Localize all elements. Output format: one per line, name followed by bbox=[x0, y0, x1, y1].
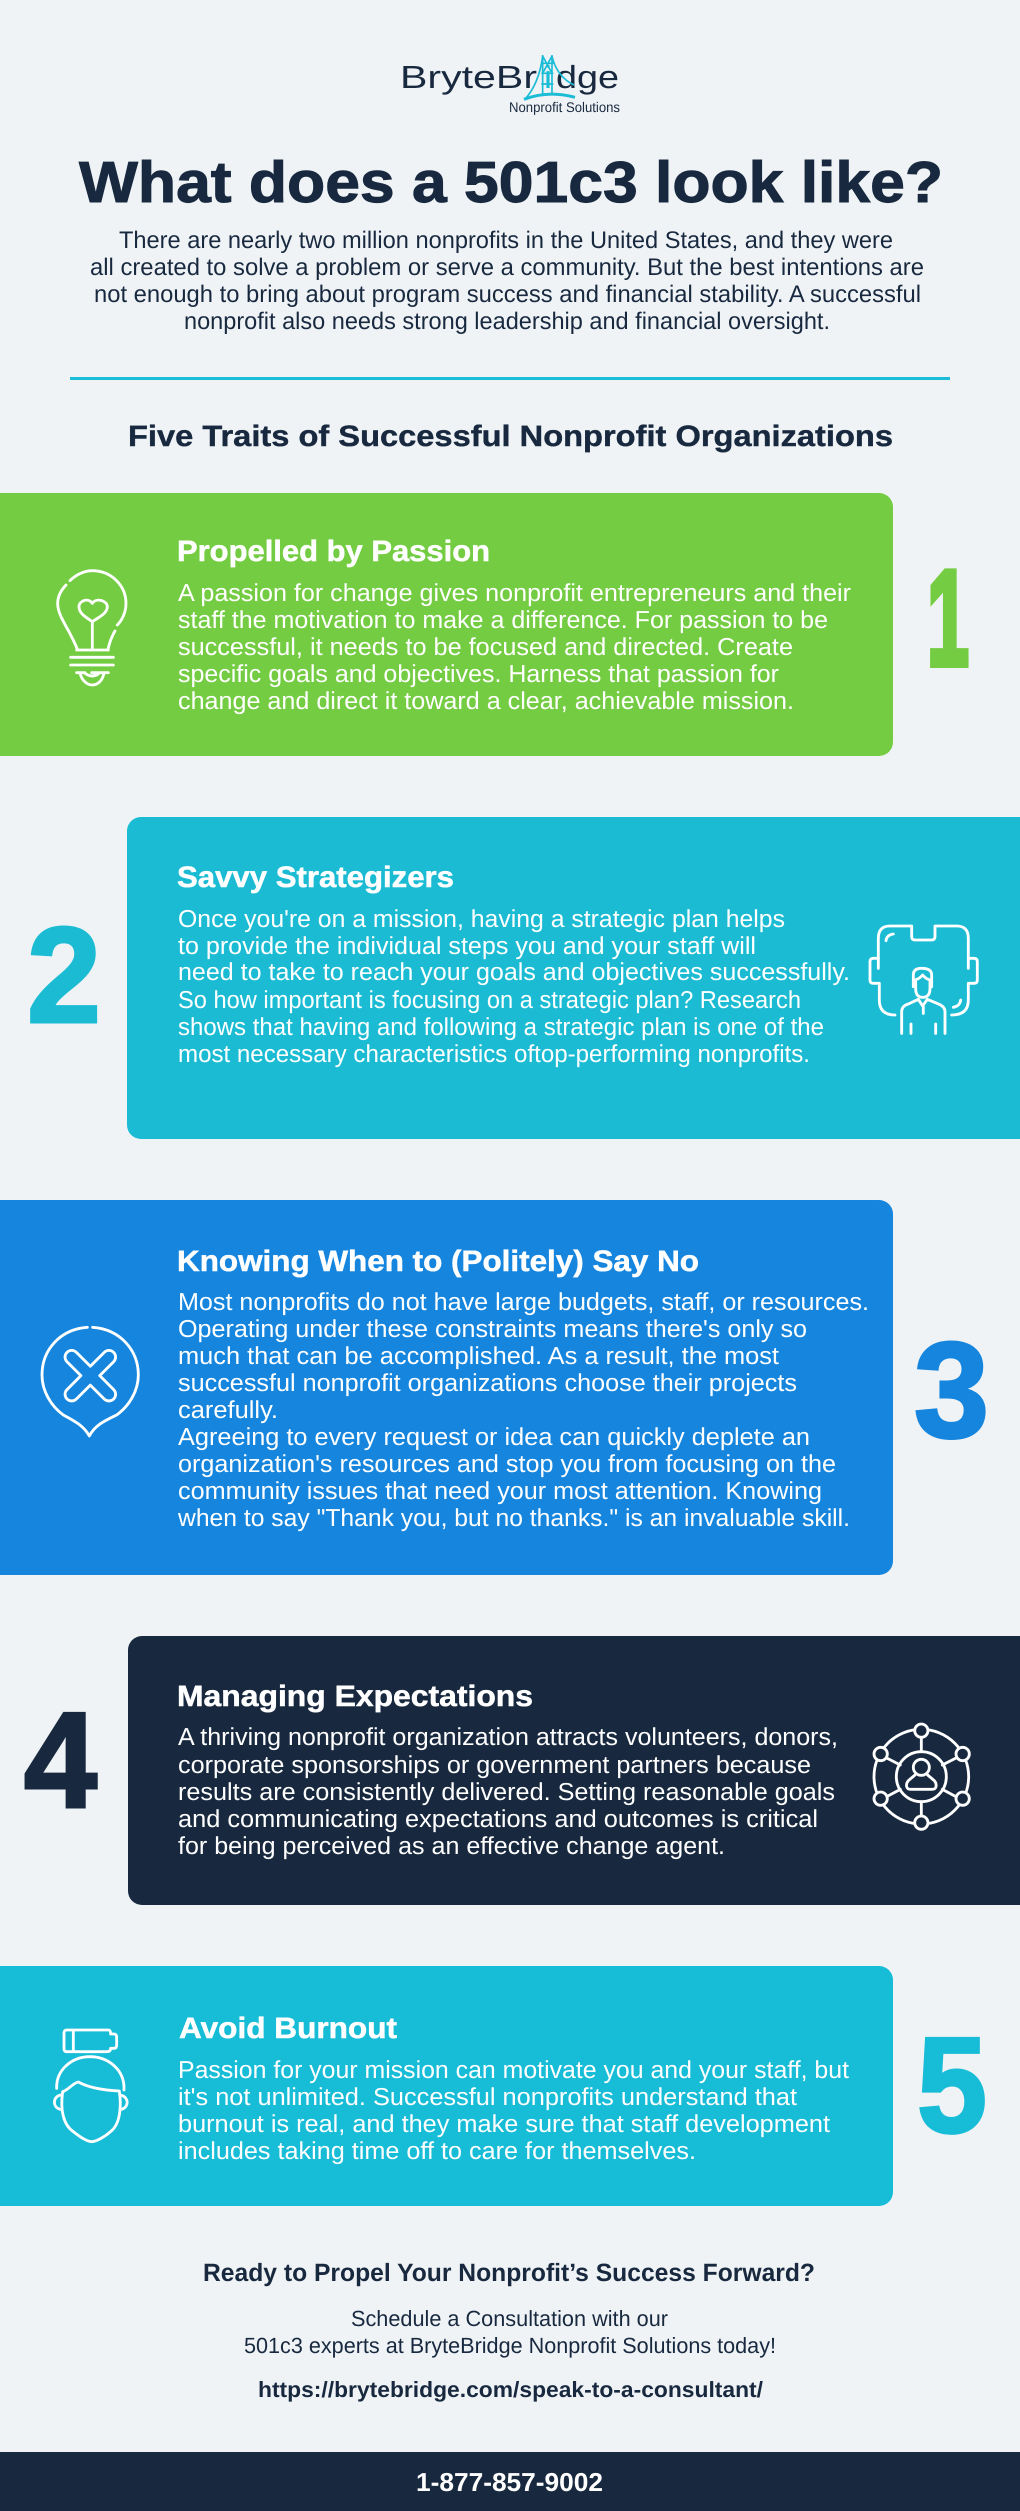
body text: corporate sponsorships or government partners because bbox=[178, 1752, 811, 1779]
logo tagline: Nonprofit Solutions bbox=[509, 99, 620, 115]
body text: change and direct it toward a clear, achievable mission. bbox=[178, 688, 794, 715]
title: What does a 501c3 look like? bbox=[79, 150, 943, 215]
body text: it's not unlimited. Successful nonprofits understand that bbox=[178, 2084, 797, 2111]
website link: https://brytebridge.com/speak-to-a-consultant/ bbox=[258, 2377, 763, 2402]
panel: trait 3 Knowing When to (Politely) Say No bbox=[0, 1200, 989, 1575]
icon: light bulb with heart bbox=[58, 571, 126, 685]
body text: successful nonprofit organizations choose their projects bbox=[178, 1370, 797, 1397]
section heading: Five Traits of Successful Nonprofit Organizations bbox=[128, 420, 893, 453]
intro paragraph: There are nearly two million nonprofits in the United States, and they were bbox=[119, 227, 893, 254]
intro paragraph: all created to solve a problem or serve a community. But the best intentions are bbox=[90, 254, 924, 281]
body text: carefully. bbox=[178, 1397, 278, 1424]
card background bbox=[128, 1636, 1020, 1905]
logo wordmark end: dge bbox=[556, 59, 619, 95]
body text: A thriving nonprofit organization attracts volunteers, donors, bbox=[178, 1724, 838, 1751]
body text: Passion for your mission can motivate you and your staff, but bbox=[178, 2057, 849, 2084]
call to action bbox=[203, 2259, 815, 2402]
body text: burnout is real, and they make sure that staff development bbox=[178, 2111, 830, 2138]
body text: much that can be accomplished. As a result, the most bbox=[178, 1343, 779, 1370]
body text: shows that having and following a strategic plan is one of the bbox=[178, 1014, 824, 1041]
intro paragraph bbox=[90, 227, 924, 335]
panel: trait 2 Savvy Strategizers bbox=[27, 817, 1020, 1139]
number 5: 5 bbox=[917, 2009, 987, 2161]
body text bbox=[178, 906, 850, 1068]
body text: Agreeing to every request or idea can quickly deplete an bbox=[178, 1424, 810, 1451]
body text: organization's resources and stop you from focusing on the bbox=[178, 1451, 836, 1478]
footer background bbox=[0, 2452, 1020, 2511]
logo wordmark hidden i: i bbox=[544, 59, 552, 95]
card background bbox=[0, 1200, 893, 1575]
call to action heading: Ready to Propel Your Nonprofit’s Success Forward? bbox=[203, 2259, 815, 2287]
call to action text bbox=[244, 2306, 776, 2358]
body text: includes taking time off to care for themselves. bbox=[178, 2138, 696, 2165]
heading: Savvy Strategizers bbox=[177, 861, 454, 894]
intro paragraph: not enough to bring about program success and financial stability. A successful bbox=[94, 281, 921, 308]
body text bbox=[178, 580, 851, 715]
body text: A passion for change gives nonprofit entrepreneurs and their bbox=[178, 580, 851, 607]
logo: BryteBridge Nonprofit Solutions bbox=[400, 55, 620, 115]
icon: X in speech bubble bbox=[42, 1327, 138, 1436]
number 3: 3 bbox=[914, 1314, 989, 1466]
body text: Operating under these constraints means there's only so bbox=[178, 1316, 807, 1343]
icon: person in puzzle piece bbox=[870, 926, 977, 1033]
body text: and communicating expectations and outcomes is critical bbox=[178, 1806, 818, 1833]
call to action text: 501c3 experts at BryteBridge Nonprofit Solutions today! bbox=[244, 2333, 776, 2358]
panel: trait 4 Managing Expectations bbox=[24, 1636, 1020, 1905]
heading: Avoid Burnout bbox=[179, 2012, 397, 2045]
body text: most necessary characteristics oftop-performing nonprofits. bbox=[178, 1041, 810, 1068]
body text: when to say "Thank you, but no thanks." is an invaluable skill. bbox=[177, 1505, 850, 1532]
phone number: 1-877-857-9002 bbox=[416, 2467, 603, 2497]
number 2: 2 bbox=[27, 899, 101, 1051]
body text: staff the motivation to make a difference. For passion to be bbox=[178, 607, 828, 634]
body text bbox=[178, 1724, 838, 1860]
body text bbox=[178, 2057, 849, 2165]
body text: So how important is focusing on a strategic plan? Research bbox=[178, 987, 801, 1014]
card background bbox=[127, 817, 1020, 1139]
body text: successful, it needs to be focused and directed. Create bbox=[178, 634, 793, 661]
heading: Knowing When to (Politely) Say No bbox=[177, 1245, 699, 1278]
body text: Once you're on a mission, having a strategic plan helps bbox=[178, 906, 785, 933]
body text: to provide the individual steps you and your staff will bbox=[178, 933, 756, 960]
icon: head with low battery bbox=[54, 2030, 127, 2142]
number 4: 4 bbox=[24, 1684, 97, 1836]
card background bbox=[0, 493, 893, 756]
body text: Most nonprofits do not have large budgets, staff, or resources. bbox=[178, 1289, 869, 1316]
icon: bridge bbox=[524, 55, 575, 99]
card background bbox=[0, 1966, 893, 2206]
body text: results are consistently delivered. Setting reasonable goals bbox=[178, 1779, 835, 1806]
heading: Propelled by Passion bbox=[177, 535, 490, 568]
body text: for being perceived as an effective change agent. bbox=[178, 1833, 725, 1860]
body text: need to take to reach your goals and objectives successfully. bbox=[178, 959, 850, 986]
icon: person network bbox=[874, 1724, 969, 1829]
logo wordmark start: BryteBr bbox=[400, 59, 537, 95]
call to action text: Schedule a Consultation with our bbox=[351, 2306, 668, 2331]
body text: specific goals and objectives. Harness that passion for bbox=[178, 661, 779, 688]
panel: trait 1 Propelled by Passion bbox=[0, 493, 969, 756]
intro paragraph: nonprofit also needs strong leadership and financial oversight. bbox=[184, 308, 830, 335]
number 1: 1 bbox=[927, 542, 969, 694]
footer band with phone number bbox=[0, 2452, 1020, 2511]
panel: trait 5 Avoid Burnout bbox=[0, 1966, 987, 2206]
heading: Managing Expectations bbox=[177, 1680, 533, 1713]
body text: community issues that need your most attention. Knowing bbox=[178, 1478, 822, 1505]
body text bbox=[177, 1289, 869, 1532]
